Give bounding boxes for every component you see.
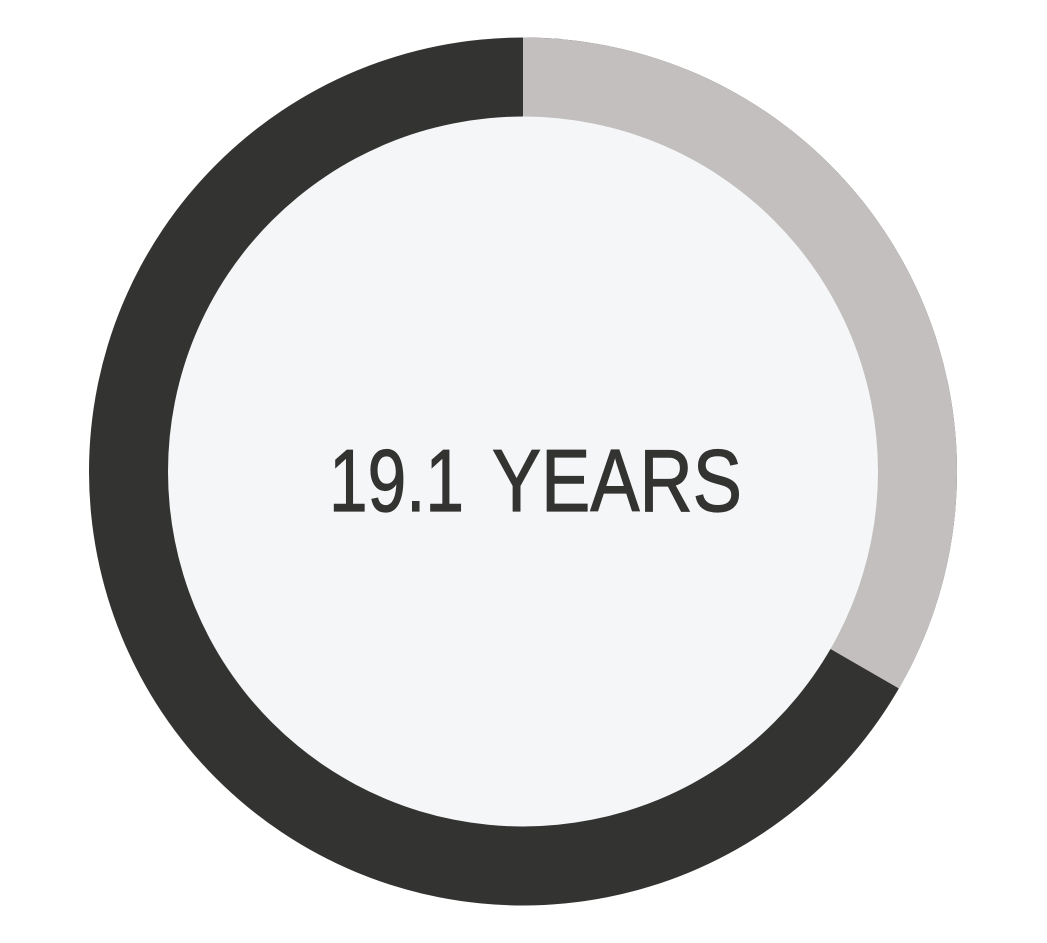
light ring segment — [523, 38, 957, 688]
centre label: 19.1 — [329, 431, 464, 530]
centre label: YEARS — [492, 431, 742, 530]
centre label — [329, 431, 742, 530]
chart centre — [168, 116, 878, 826]
dark ring segment — [89, 38, 957, 906]
